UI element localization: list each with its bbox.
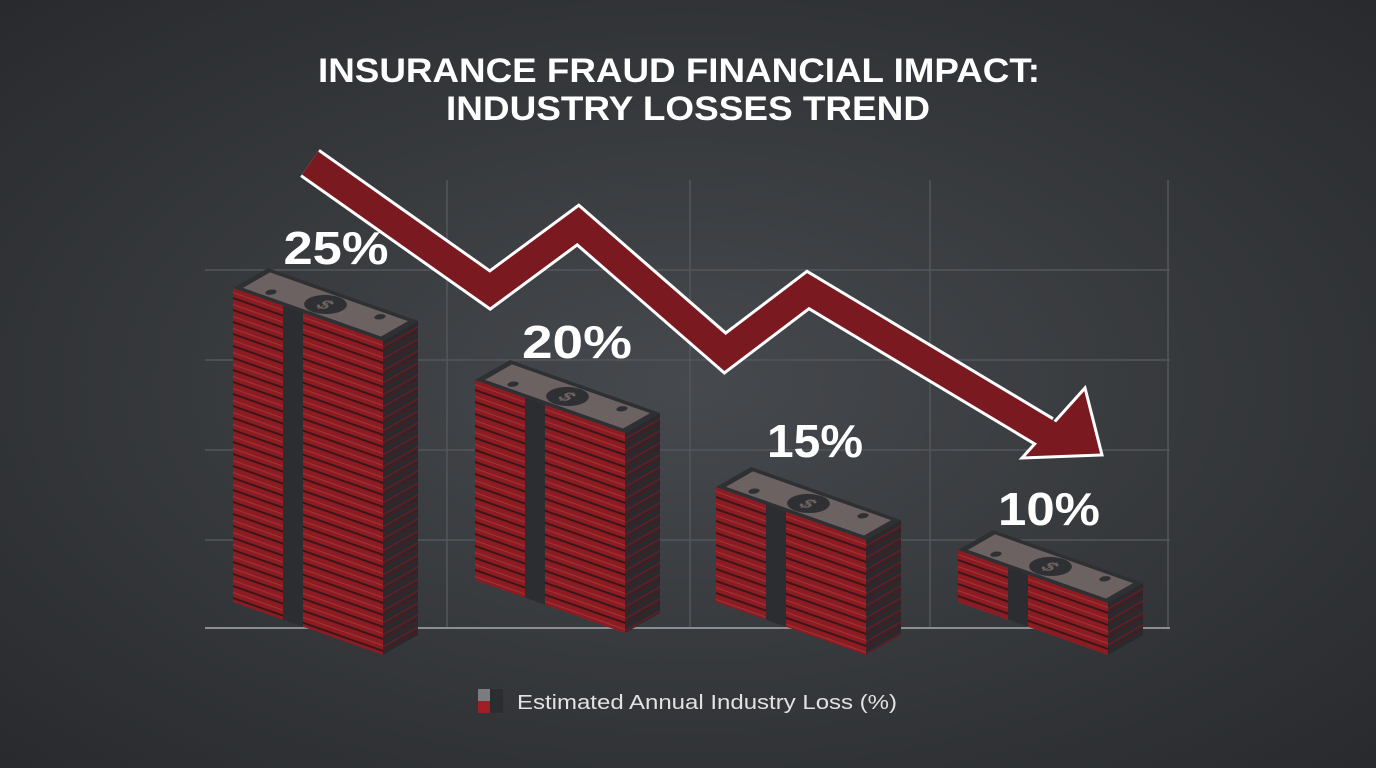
legend: Estimated Annual Industry Loss (%) [517, 692, 897, 714]
title [318, 52, 1040, 128]
stack: 25% [233, 268, 418, 655]
stack: 25%: $ [309, 298, 339, 313]
title: INDUSTRY LOSSES TREND [446, 90, 930, 128]
stack: 20% [475, 360, 660, 633]
stack: 10%: $ [1034, 560, 1064, 575]
trend arrow [310, 163, 1102, 458]
stack: 10% [958, 530, 1143, 655]
title: INSURANCE FRAUD FINANCIAL IMPACT: [318, 52, 1040, 90]
stack: 20%: $ [551, 390, 581, 405]
legend [478, 689, 897, 714]
value labels: 25% [284, 222, 388, 274]
value labels: 15% [767, 415, 863, 467]
stack: 15% [716, 467, 901, 655]
stack: 15%: $ [792, 497, 822, 512]
value labels: 20% [522, 316, 632, 368]
value labels [284, 222, 1100, 535]
grid [205, 180, 1170, 628]
value labels: 10% [998, 483, 1100, 535]
